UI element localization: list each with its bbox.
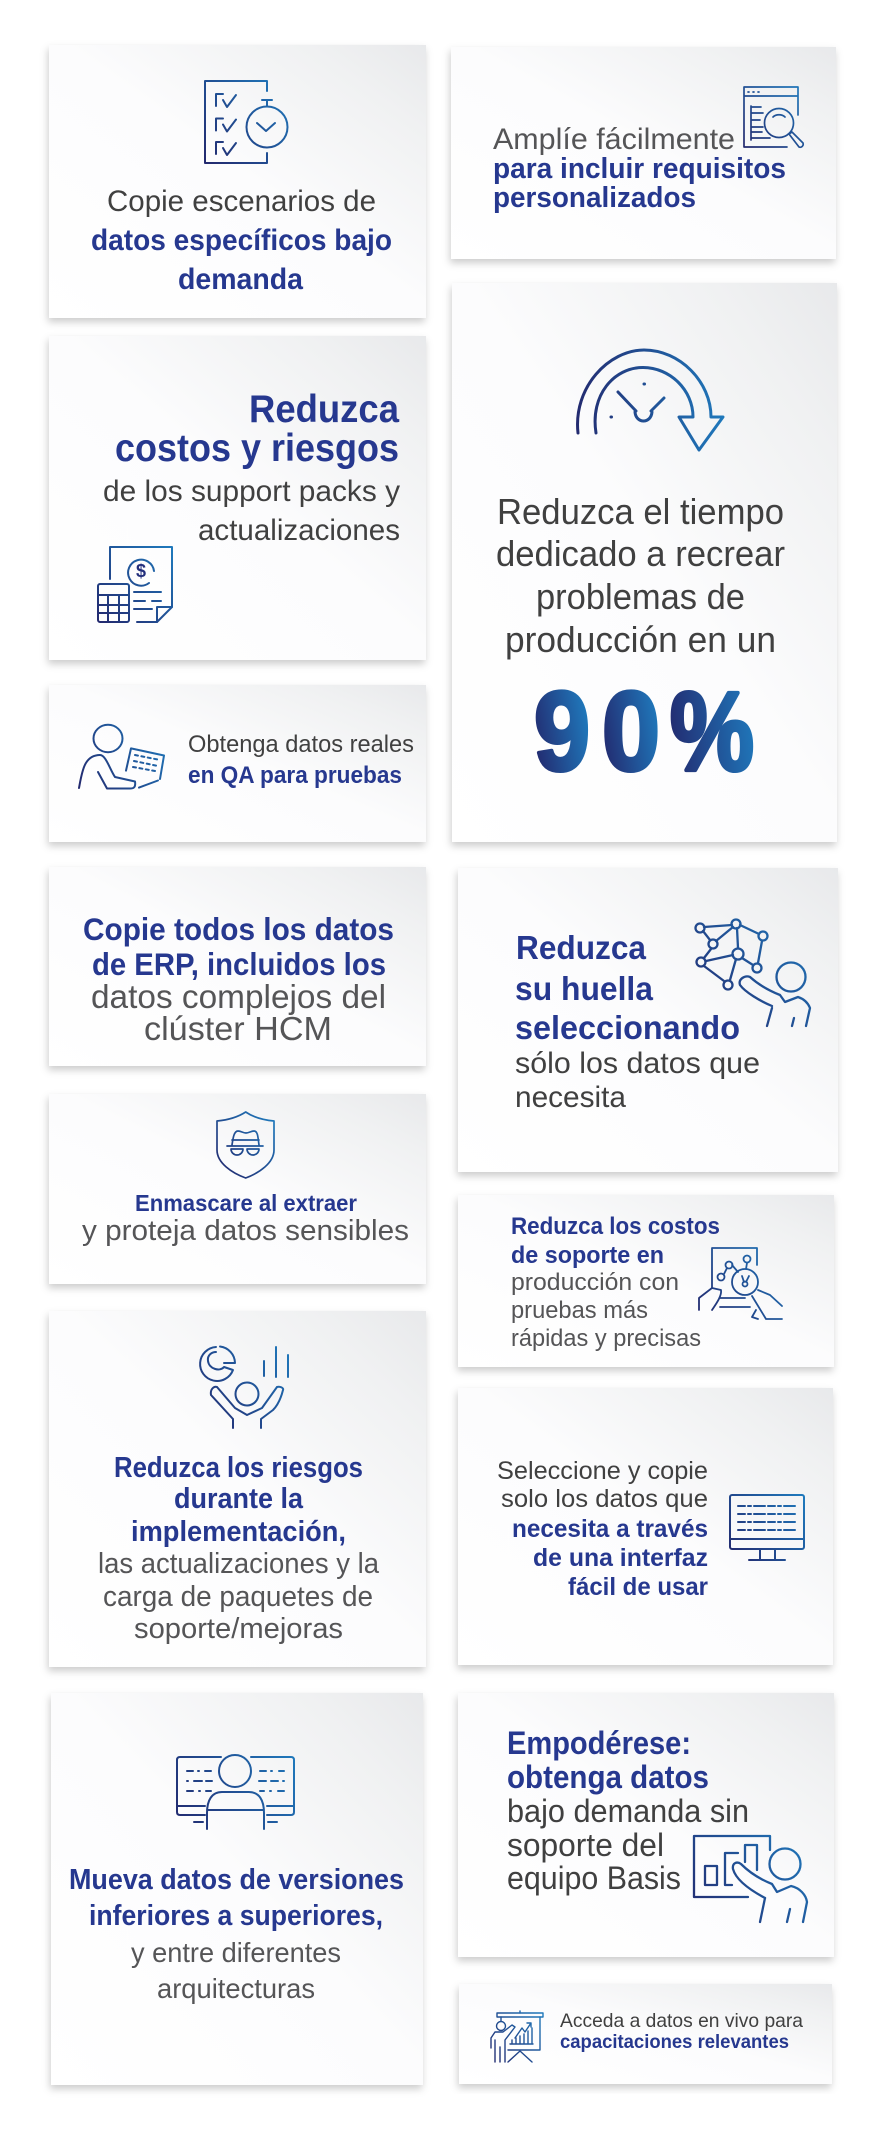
card background — [49, 867, 426, 1066]
icon: person in front of monitor — [177, 1755, 294, 1829]
text block: su huella — [515, 971, 653, 1008]
text block: actualizaciones — [198, 514, 400, 547]
panel: obtenga datos reales — [49, 685, 426, 842]
big number 90% — [534, 669, 754, 794]
text block: carga de paquetes de — [103, 1581, 373, 1613]
text block: producción con — [511, 1269, 679, 1296]
text block: necesita a través — [512, 1515, 708, 1543]
icon: hands holding tablet with magnifier — [699, 1248, 782, 1319]
icon: person pointing at bar chart — [694, 1836, 807, 1922]
text block: Reduzca el tiempo — [497, 491, 784, 532]
text block — [515, 930, 760, 1114]
card background — [49, 1094, 426, 1284]
icon: person with pie chart and bars — [200, 1346, 288, 1428]
text block: Amplíe fácilmente — [493, 123, 735, 156]
text block: personalizados — [493, 182, 696, 214]
text block: de una interfaz — [533, 1544, 708, 1572]
card background — [458, 1388, 833, 1665]
card background — [49, 1311, 426, 1667]
text block: Empodérese: — [507, 1725, 691, 1761]
panel: copie escenarios — [49, 45, 426, 318]
text block: Reduzca — [516, 930, 646, 967]
text block: y entre diferentes — [131, 1937, 341, 1968]
card background — [451, 47, 836, 259]
panel: reduzca costos y riesgos — [49, 336, 426, 660]
text block: dedicado a recrear — [496, 533, 785, 574]
text block: pruebas más — [511, 1297, 648, 1324]
text block: para incluir requisitos — [493, 153, 786, 185]
text block: solo los datos que — [501, 1485, 708, 1513]
text block — [69, 1864, 404, 2004]
text block: y proteja datos sensibles — [82, 1215, 409, 1247]
panel: acceda a datos en vivo — [459, 1984, 832, 2084]
text block: Copie todos los datos — [83, 911, 394, 947]
text block: las actualizaciones y la — [98, 1548, 379, 1580]
icon: shield with spy — [217, 1112, 274, 1178]
text block: inferiores a superiores, — [89, 1900, 383, 1932]
text block: Obtenga datos reales — [188, 731, 414, 758]
icon: window with magnifier — [744, 87, 803, 147]
card background — [459, 1984, 832, 2084]
text block: obtenga datos — [507, 1759, 709, 1795]
text block: Enmascare al extraer — [135, 1190, 357, 1216]
text block: de soporte en — [511, 1242, 664, 1269]
text block: durante la — [174, 1483, 304, 1515]
card background — [458, 868, 838, 1172]
text block — [82, 1190, 409, 1247]
text block: necesita — [515, 1081, 626, 1114]
text block: capacitaciones relevantes — [560, 2031, 789, 2053]
icon: monitor with data — [730, 1495, 804, 1560]
panel: amplíe fácilmente — [451, 47, 836, 259]
panel: reduzca los riesgos — [49, 1311, 426, 1667]
text block — [496, 491, 785, 660]
text block: Acceda a datos en vivo para — [560, 2010, 803, 2032]
text block — [511, 1213, 720, 1352]
text block — [83, 911, 394, 1047]
card background — [458, 1693, 834, 1957]
text block: Reduzca — [249, 388, 400, 431]
icon: person at laptop — [79, 725, 164, 788]
icon: clock with curved arrow — [578, 350, 723, 450]
icon: invoice and calculator: $ — [136, 561, 146, 581]
text block: Mueva datos de versiones — [69, 1864, 404, 1896]
text block: producción en un — [505, 619, 776, 660]
text block: equipo Basis — [507, 1860, 681, 1896]
text block: Reduzca los riesgos — [114, 1452, 363, 1484]
text block: costos y riesgos — [115, 427, 399, 470]
text block: sólo los datos que — [515, 1047, 760, 1080]
icon: person selecting network nodes — [696, 920, 810, 1026]
panel: seleccione y copie — [458, 1388, 833, 1665]
panel: copie todos los datos — [49, 867, 426, 1066]
text block: Copie escenarios de — [107, 185, 376, 218]
icon: checklist and stopwatch — [205, 81, 288, 163]
text block — [98, 1452, 379, 1645]
icon: presenter with chart — [491, 2011, 543, 2062]
big number 90%: 9 — [534, 669, 590, 794]
text block — [493, 123, 786, 214]
text block: rápidas y precisas — [511, 1325, 701, 1352]
text block: de ERP, incluidos los — [92, 946, 386, 982]
text block: fácil de usar — [568, 1573, 708, 1601]
text block: Seleccione y copie — [497, 1457, 708, 1485]
text block: de los support packs y — [103, 475, 400, 508]
card background — [51, 1693, 423, 2085]
text block: en QA para pruebas — [188, 762, 402, 789]
icon: invoice and calculator — [98, 547, 172, 622]
text block — [188, 731, 414, 789]
big number 90%: % — [670, 669, 754, 794]
card background — [458, 1195, 834, 1367]
text block: soporte del — [507, 1827, 664, 1863]
big number 90%: 0 — [602, 669, 660, 794]
text block: demanda — [178, 263, 304, 296]
text block — [507, 1725, 749, 1896]
panel: enmascare al extraer — [49, 1094, 426, 1284]
text block: implementación, — [131, 1516, 346, 1548]
panel: reduzca el tiempo 90% — [452, 283, 837, 842]
panel: reduzca los costos de soporte — [458, 1195, 834, 1367]
text block: arquitecturas — [157, 1973, 315, 2004]
panel: reduzca su huella — [458, 868, 838, 1172]
text block — [103, 388, 400, 547]
text block: Reduzca los costos — [511, 1213, 720, 1240]
text block: seleccionando — [515, 1010, 740, 1047]
card background — [49, 685, 426, 842]
panel: empodérese — [458, 1693, 834, 1957]
card background — [452, 283, 837, 842]
card background — [49, 45, 426, 318]
text block — [497, 1457, 708, 1601]
text block: problemas de — [536, 576, 745, 617]
text block: datos específicos bajo — [91, 224, 392, 257]
text block: datos complejos del — [91, 978, 386, 1015]
card background — [49, 336, 426, 660]
text block — [91, 185, 392, 296]
text block: soporte/mejoras — [134, 1613, 343, 1645]
text block: bajo demanda sin — [507, 1793, 749, 1829]
text block: clúster HCM — [144, 1010, 332, 1047]
text block — [560, 2010, 803, 2053]
panel: mueva datos — [51, 1693, 423, 2085]
